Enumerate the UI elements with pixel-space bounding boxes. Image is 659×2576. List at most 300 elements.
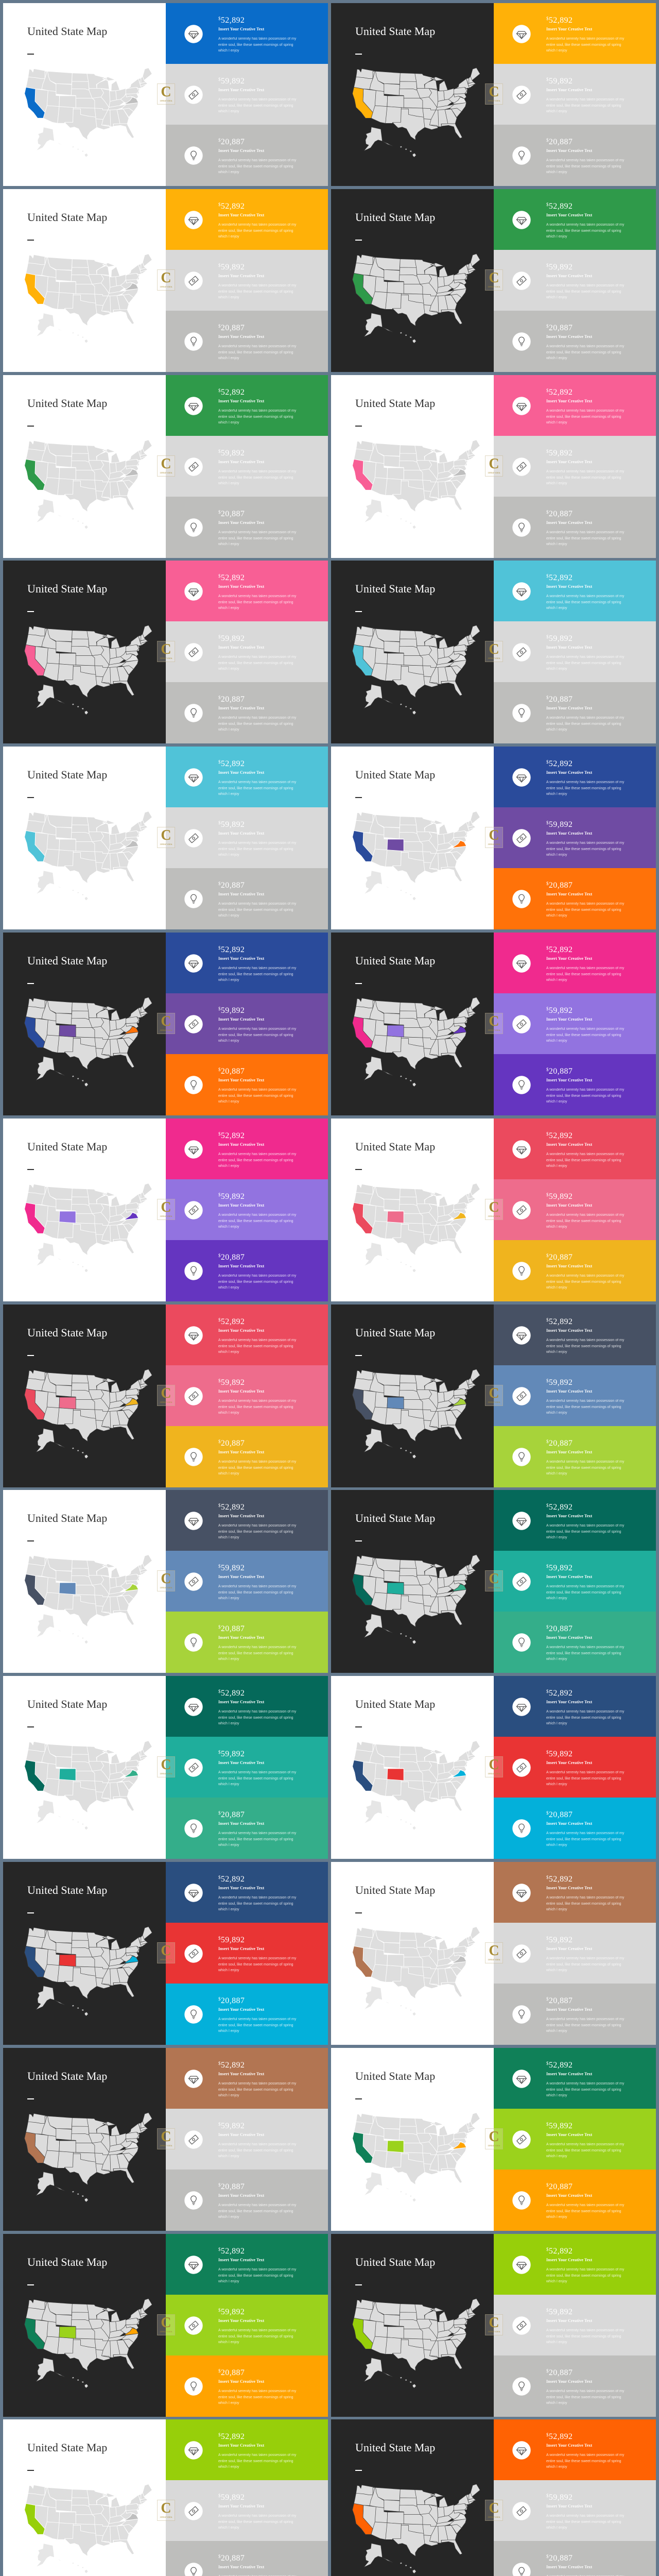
icon: diamond [184,1884,203,1902]
body: entire soul, like these sweet mornings of spring [546,1219,621,1223]
icon: ticket [512,2502,531,2520]
icon: ticket [184,1015,203,1033]
band 1 [494,1490,656,1551]
body: which I enjoy [218,1411,239,1415]
subtitle: Insert Your Creative Text [218,2318,264,2323]
panel: slide 17 [3,1490,328,1673]
dash [27,983,34,984]
body [546,2452,624,2470]
body: A wonderful serenity has taken possession of my [546,2514,624,2518]
body: A wonderful serenity has taken possession of my [546,2018,624,2021]
icon: ticket [184,86,203,104]
watermark: GREAT IDEA [488,2516,500,2518]
price: $20,887 [546,1810,573,1819]
panel: slide 26 [331,2234,656,2417]
subtitle: Insert Your Creative Text [218,399,264,403]
body: A wonderful serenity has taken possession of my [546,2329,624,2332]
body: entire soul, like these sweet mornings of spring [546,601,621,604]
map [331,1304,494,1487]
body: A wonderful serenity has taken possession of my [546,1027,624,1031]
title: United State Map [27,1512,107,1524]
title: United State Map [27,2070,107,2082]
watermark: GREAT IDEA [488,657,500,659]
subtitle: Insert Your Creative Text [218,956,264,961]
title: United State Map [27,1140,107,1153]
body [546,530,624,547]
body [546,1273,624,1291]
watermark [485,1199,503,1220]
band 3 [494,1798,656,1859]
dash [27,54,34,55]
body: entire soul, like these sweet mornings of spring [546,2335,621,2338]
band 2 [166,2480,328,2541]
icon: diamond [184,954,203,973]
subtitle: Insert Your Creative Text [218,1203,264,1208]
price: $20,887 [218,1996,245,2005]
icon: diamond [184,211,203,229]
body: entire soul, like these sweet mornings of spring [546,1902,621,1906]
subtitle: Insert Your Creative Text [218,1264,264,1268]
body [218,159,297,174]
body [546,469,624,486]
price: $52,892 [546,202,573,211]
body: which I enjoy [546,1350,567,1354]
band 3 [166,311,328,372]
band 3 [494,1426,656,1487]
map [331,375,494,558]
title: United State Map [355,397,435,410]
body [546,2513,624,2531]
icon: bulb [184,332,203,351]
subtitle: Insert Your Creative Text [218,1017,264,1022]
body: entire soul, like these sweet mornings of spring [218,1280,293,1284]
icon: ticket [184,829,203,848]
watermark [485,2128,503,2149]
watermark: C [161,1757,171,1773]
icon: bulb [512,1819,531,1838]
icon: ticket [184,1572,203,1591]
watermark [485,1756,503,1777]
body: A wonderful serenity has taken possession of my [218,1832,296,1835]
subtitle: Insert Your Creative Text [218,520,264,525]
panel: slide 22 [331,1862,656,2045]
body [218,530,296,547]
body: A wonderful serenity has taken possession of my [218,1274,296,1278]
body: A wonderful serenity has taken possession of my [546,1460,624,1464]
body: which I enjoy [218,1783,239,1786]
watermark: GREAT IDEA [160,2516,172,2518]
watermark [157,2314,175,2335]
body: entire soul, like these sweet mornings of spring [218,1219,293,1223]
map [331,747,494,929]
body: A wonderful serenity has taken possession of my [546,2389,624,2393]
body: entire soul, like these sweet mornings of spring [218,290,293,294]
panel: slide 1 [3,3,328,186]
watermark: GREAT IDEA [160,285,172,288]
band 3 [166,868,328,929]
body: which I enjoy [546,543,567,546]
map [3,2234,166,2417]
icon: bulb [184,1262,203,1280]
body: which I enjoy [546,1100,567,1104]
price: $52,892 [546,2247,573,2256]
map [3,2048,166,2231]
title: United State Map [355,2441,435,2454]
body: A wonderful serenity has taken possession of my [218,470,296,473]
body: which I enjoy [546,296,567,299]
body [546,1026,624,1044]
body: A wonderful serenity has taken possession of my [218,902,296,906]
body [218,654,296,672]
band 2 [166,807,328,868]
subtitle: Insert Your Creative Text [546,2379,592,2384]
price: $20,887 [218,881,245,890]
body: which I enjoy [546,2401,567,2405]
band 3 [166,1426,328,1487]
watermark: GREAT IDEA [488,2330,500,2333]
panel: slide 20 [331,1676,656,1859]
body: entire soul, like these sweet mornings of spring [218,2396,293,2399]
body: which I enjoy [218,1908,239,1911]
body: which I enjoy [218,2465,239,2469]
price: $59,892 [218,1378,245,1387]
title: United State Map [355,1140,435,1153]
icon: ticket [512,2130,531,2149]
price: $52,892 [546,1875,573,1884]
band 3 [494,868,656,929]
watermark: C [489,84,499,100]
body: entire soul, like these sweet mornings of spring [546,2024,621,2027]
body: which I enjoy [546,2029,567,2033]
body: A wonderful serenity has taken possession of my [546,1153,624,1156]
dash [27,1169,34,1170]
price: $59,892 [546,1192,573,1201]
body [218,1212,296,1230]
subtitle: Insert Your Creative Text [546,956,592,961]
watermark [157,1199,175,1220]
band 2 [494,250,656,311]
body: which I enjoy [218,1350,239,1354]
body: entire soul, like these sweet mornings of spring [546,1159,621,1162]
body: A wonderful serenity has taken possession of my [218,1027,296,1031]
icon: diamond [184,768,203,787]
subtitle: Insert Your Creative Text [546,1328,592,1333]
band 1 [166,1304,328,1365]
map [331,561,494,743]
body: A wonderful serenity has taken possession of my [218,1460,296,1464]
body [218,1087,296,1105]
title: United State Map [27,1884,107,1896]
body [218,1459,296,1477]
watermark: GREAT IDEA [488,2144,500,2147]
subtitle: Insert Your Creative Text [546,1574,592,1579]
subtitle: Insert Your Creative Text [546,1946,592,1951]
body: which I enjoy [218,792,239,796]
watermark [157,2128,175,2149]
body: A wonderful serenity has taken possession of my [218,1585,296,1588]
map [352,253,480,343]
watermark: GREAT IDEA [488,843,500,845]
body: which I enjoy [546,1597,567,1600]
price: $20,887 [218,510,245,518]
body: entire soul, like these sweet mornings of spring [218,2335,293,2338]
price: $59,892 [546,2493,573,2502]
body: entire soul, like these sweet mornings of spring [218,2460,293,2463]
body: entire soul, like these sweet mornings of spring [218,1466,293,1470]
panel: slide 27 [3,2419,328,2576]
watermark: GREAT IDEA [488,99,500,102]
body [218,37,297,53]
body: A wonderful serenity has taken possession of my [546,841,624,845]
icon: ticket [512,1387,531,1405]
body: entire soul, like these sweet mornings of spring [218,2210,293,2213]
body: entire soul, like these sweet mornings of spring [546,415,621,419]
body: A wonderful serenity has taken possession of my [218,2514,296,2518]
subtitle: Insert Your Creative Text [546,706,592,710]
subtitle: Insert Your Creative Text [218,1142,264,1147]
band 3 [494,1054,656,1115]
title: United State Map [27,25,107,38]
body: entire soul, like these sweet mornings of spring [218,1777,293,1781]
band 3 [166,2170,328,2231]
title: United State Map [27,582,107,595]
subtitle: Insert Your Creative Text [218,1700,264,1704]
body [218,2267,296,2284]
body: which I enjoy [218,1657,239,1661]
body: which I enjoy [546,1039,567,1043]
icon: ticket [512,829,531,848]
subtitle: Insert Your Creative Text [546,334,592,339]
icon: bulb [512,2191,531,2210]
price: $20,887 [218,2182,245,2191]
subtitle: Insert Your Creative Text [218,1635,264,1640]
subtitle: Insert Your Creative Text [218,2193,264,2198]
body [546,654,624,672]
map [3,375,166,558]
body [546,2388,624,2406]
price: $20,887 [218,1810,245,1819]
icon: ticket [184,2316,203,2335]
panel: slide 13 [3,1118,328,1301]
watermark: GREAT IDEA [160,843,172,845]
body [218,1026,296,1044]
price: $59,892 [218,263,245,272]
panel: slide 8 [331,561,656,743]
body [218,98,297,113]
map [3,1676,166,1859]
watermark: C [161,84,171,100]
title: United State Map [355,211,435,224]
watermark: GREAT IDEA [160,1401,172,1403]
map [3,2419,166,2576]
band 2 [494,1179,656,1240]
watermark [157,1013,175,1034]
icon: ticket [184,272,203,290]
subtitle: Insert Your Creative Text [218,27,264,31]
watermark: C [161,2315,171,2331]
body: entire soul, like these sweet mornings of spring [546,1094,621,1098]
body: which I enjoy [218,1286,239,1290]
subtitle: Insert Your Creative Text [218,770,264,775]
watermark: C [489,1013,499,1029]
body: which I enjoy [546,482,567,485]
icon: diamond [184,2070,203,2088]
body: entire soul, like these sweet mornings of spring [546,351,621,354]
watermark: GREAT IDEA [488,1029,500,1031]
price: $59,892 [218,1564,245,1572]
band 2 [494,64,656,125]
band 1 [166,2234,328,2295]
watermark [485,83,503,105]
price: $59,892 [546,1006,573,1015]
watermark: GREAT IDEA [160,99,172,102]
body: which I enjoy [218,2029,239,2033]
watermark [485,641,503,662]
dash [355,983,362,984]
body: entire soul, like these sweet mornings of spring [546,1280,621,1284]
title: United State Map [355,2256,435,2268]
price: $59,892 [218,2122,245,2130]
body: A wonderful serenity has taken possession of my [218,2082,296,2086]
body: A wonderful serenity has taken possession of my [218,409,296,413]
body [546,1212,624,1230]
icon: bulb [512,2377,531,2396]
subtitle: Insert Your Creative Text [546,1078,592,1082]
watermark: C [161,641,171,657]
band 3 [494,1612,656,1673]
body: entire soul, like these sweet mornings of spring [218,415,293,419]
title: United State Map [355,1698,435,1710]
watermark: GREAT IDEA [160,2330,172,2333]
body: which I enjoy [218,543,239,546]
price: $59,892 [218,2308,245,2316]
body: A wonderful serenity has taken possession of my [218,345,296,348]
price: $52,892 [546,388,573,397]
body [546,1895,624,1912]
body [546,1087,624,1105]
body: A wonderful serenity has taken possession of my [546,1771,624,1774]
icon: bulb [184,2377,203,2396]
body [546,1151,624,1169]
band 1 [494,2419,656,2480]
body: which I enjoy [218,853,239,857]
body [218,965,296,983]
watermark [157,1942,175,1963]
band 3 [166,682,328,743]
icon: bulb [184,2005,203,2024]
body: entire soul, like these sweet mornings of spring [218,1902,293,1906]
watermark: GREAT IDEA [488,471,500,474]
watermark: C [161,2129,171,2145]
body [546,715,624,733]
band 2 [494,2109,656,2170]
body: entire soul, like these sweet mornings of spring [546,1345,621,1348]
body: entire soul, like these sweet mornings of spring [546,2274,621,2278]
subtitle: Insert Your Creative Text [218,1886,264,1890]
watermark: C [489,641,499,657]
band 1 [494,2048,656,2109]
icon: ticket [184,2502,203,2520]
band 2 [166,436,328,497]
body: A wonderful serenity has taken possession of my [546,1896,624,1900]
dash [355,1726,362,1727]
map [331,1490,494,1673]
subtitle: Insert Your Creative Text [218,213,264,217]
body: entire soul, like these sweet mornings of spring [546,290,621,294]
body: which I enjoy [546,792,567,796]
body: which I enjoy [218,235,239,239]
watermark: GREAT IDEA [488,285,500,288]
dash [355,797,362,798]
subtitle: Insert Your Creative Text [546,1760,592,1765]
watermark: C [161,827,171,843]
dash [355,426,362,427]
title: United State Map [27,2256,107,2268]
body: which I enjoy [546,1225,567,1229]
subtitle: Insert Your Creative Text [218,1514,264,1518]
body: entire soul, like these sweet mornings of spring [546,722,621,726]
body: A wonderful serenity has taken possession of my [546,37,624,41]
body: entire soul, like these sweet mornings of spring [218,104,293,108]
dash [27,2098,34,2099]
band 1 [494,933,656,993]
body: which I enjoy [546,1722,567,1725]
body [546,965,624,983]
map [331,933,494,1115]
band 3 [494,2170,656,2231]
body: entire soul, like these sweet mornings of spring [546,662,621,665]
body: which I enjoy [546,171,567,174]
watermark [485,1385,503,1406]
watermark [485,1013,503,1034]
body: which I enjoy [218,978,239,982]
body: A wonderful serenity has taken possession of my [546,531,624,534]
body: A wonderful serenity has taken possession of my [546,902,624,906]
dash [355,240,362,241]
body: which I enjoy [546,110,567,113]
dash [27,426,34,427]
body [546,2016,624,2034]
body: which I enjoy [546,1536,567,1539]
body: which I enjoy [546,606,567,610]
body [546,284,624,299]
map [25,254,152,343]
panel: slide 16 [331,1304,656,1487]
watermark: C [489,2500,499,2516]
icon: ticket [512,457,531,476]
price: $52,892 [546,1689,573,1698]
body: which I enjoy [546,1164,567,1168]
body: A wonderful serenity has taken possession of my [546,1338,624,1342]
watermark: GREAT IDEA [160,1215,172,1217]
body: which I enjoy [218,2341,239,2344]
body: entire soul, like these sweet mornings of spring [546,1530,621,1534]
dash [27,611,34,612]
body: entire soul, like these sweet mornings of spring [546,2088,621,2092]
price: $20,887 [218,324,245,332]
body [546,345,624,360]
body: entire soul, like these sweet mornings of spring [218,1033,293,1037]
dash [355,2470,362,2471]
price: $52,892 [546,1317,573,1326]
body: A wonderful serenity has taken possession of my [546,470,624,473]
band 3 [166,1798,328,1859]
body: entire soul, like these sweet mornings of spring [546,973,621,976]
band 1 [166,375,328,436]
body: which I enjoy [218,1969,239,1972]
subtitle: Insert Your Creative Text [546,520,592,525]
band 2 [166,621,328,682]
